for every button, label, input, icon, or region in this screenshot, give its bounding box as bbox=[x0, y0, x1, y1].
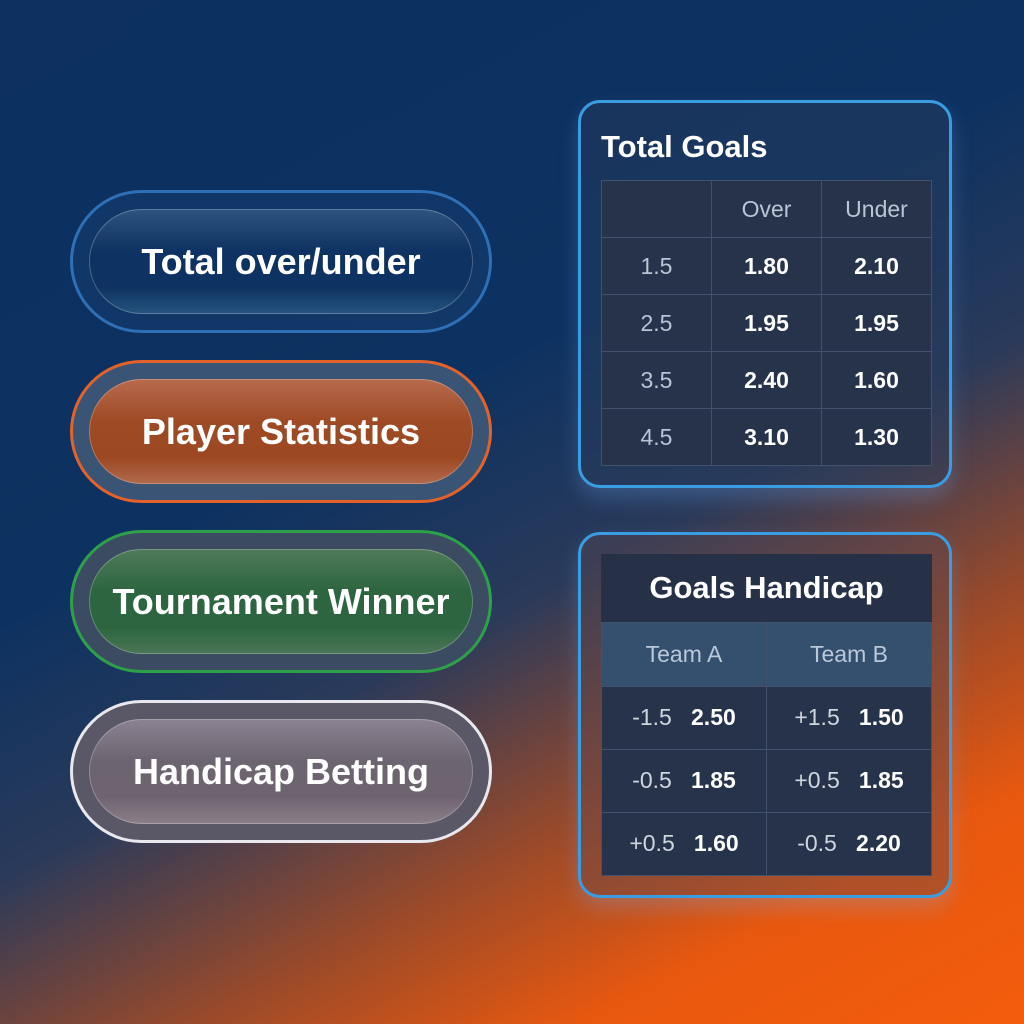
pill: Tournament Winner bbox=[70, 530, 492, 673]
pill: Handicap Betting: Handicap Betting bbox=[133, 750, 429, 792]
panel: Total Goals bbox=[578, 100, 952, 488]
pill: Tournament Winner: Tournament Winner bbox=[112, 580, 450, 622]
table: total goals odds: 2.10 bbox=[854, 252, 899, 278]
table: handicap odds bbox=[601, 554, 932, 876]
pill: Total over/under bbox=[70, 190, 492, 333]
pill: Player Statistics bbox=[70, 360, 492, 503]
heading: Total Goals: Total Goals bbox=[601, 129, 768, 164]
panel: Goals Handicap bbox=[578, 532, 952, 898]
table: handicap odds: Team B bbox=[810, 640, 888, 666]
table: handicap odds: Goals Handicap bbox=[649, 570, 884, 605]
pill: Handicap Betting bbox=[70, 700, 492, 843]
table: total goals odds: Over bbox=[742, 196, 791, 222]
table: total goals odds: 2.5 bbox=[640, 310, 672, 336]
table: handicap odds: -1.5 2.50 bbox=[632, 704, 736, 730]
table: total goals odds: Under bbox=[845, 196, 908, 222]
table: handicap odds: +1.5 1.50 bbox=[794, 704, 904, 730]
pill: Total over/under: Total over/under bbox=[141, 240, 421, 282]
table: handicap odds: Team A bbox=[646, 640, 722, 666]
table: handicap odds: -0.5 2.20 bbox=[797, 830, 901, 856]
table: total goals odds: 1.5 bbox=[640, 252, 672, 278]
table: total goals odds: 1.95 bbox=[744, 310, 789, 336]
table: total goals odds: 1.60 bbox=[854, 366, 899, 392]
table: total goals odds bbox=[601, 180, 932, 466]
table: handicap odds: +0.5 1.85 bbox=[794, 767, 904, 793]
table: handicap odds: -0.5 1.85 bbox=[632, 767, 736, 793]
table: total goals odds: 1.95 bbox=[854, 310, 899, 336]
table: total goals odds: 4.5 bbox=[640, 424, 672, 450]
table: total goals odds: 2.40 bbox=[744, 366, 789, 392]
table: total goals odds: 1.80 bbox=[744, 252, 789, 278]
table: handicap odds: +0.5 1.60 bbox=[629, 830, 739, 856]
table: total goals odds: 1.30 bbox=[854, 424, 899, 450]
table: total goals odds: 3.10 bbox=[744, 424, 789, 450]
table: total goals odds: 3.5 bbox=[640, 366, 672, 392]
pill: Player Statistics: Player Statistics bbox=[142, 410, 420, 452]
